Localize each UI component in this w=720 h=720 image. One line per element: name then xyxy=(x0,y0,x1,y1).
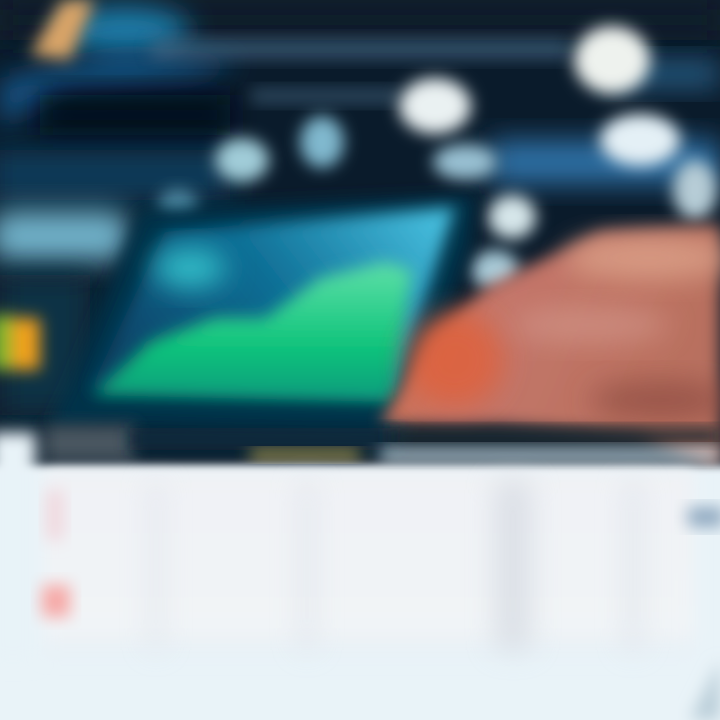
tablet frame xyxy=(50,195,475,435)
lower right shadow xyxy=(690,660,720,720)
green area chart xyxy=(92,262,412,402)
hand xyxy=(380,225,720,470)
bright bokeh blobs xyxy=(158,26,717,290)
pink row marker xyxy=(46,490,64,540)
yellow accent xyxy=(250,450,360,460)
chart glow xyxy=(154,248,226,288)
background light streaks xyxy=(0,0,720,415)
table column shading xyxy=(150,480,641,650)
tablet screen xyxy=(90,207,455,392)
table sheet xyxy=(44,470,694,656)
tablet xyxy=(50,195,475,435)
pink highlight cell xyxy=(42,585,70,617)
small orange blob, top left xyxy=(30,0,95,60)
table edge shadow xyxy=(45,425,720,462)
white document xyxy=(0,432,720,720)
right edge tab xyxy=(688,507,720,527)
icon: coloured bar at left edge xyxy=(0,315,40,370)
left page edge xyxy=(0,432,36,662)
